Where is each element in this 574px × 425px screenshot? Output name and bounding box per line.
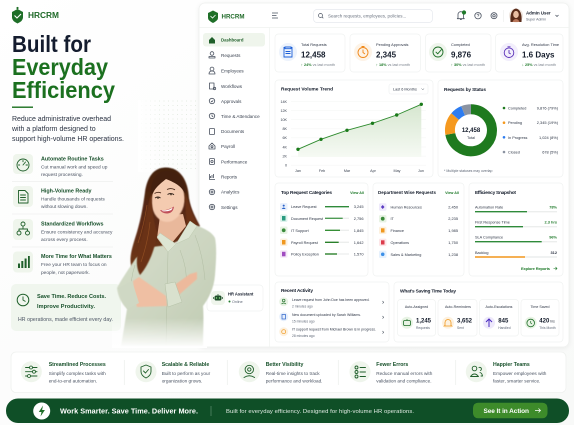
donut card: 12,458 <box>462 128 481 134</box>
x axis: May <box>394 169 401 173</box>
benefit: streamlined <box>21 361 106 384</box>
button: See It in Action <box>484 408 529 415</box>
KPI: resolution time <box>496 34 563 72</box>
top bar: Super Admin <box>526 18 546 22</box>
benefit: scalable: Built to perform as your <box>162 371 211 376</box>
x axis: Apr <box>370 169 377 173</box>
icon: clipboard <box>284 47 292 57</box>
row: leave request: Leave Request <box>291 205 317 209</box>
metric: backlog <box>475 250 558 257</box>
forearms <box>133 277 167 307</box>
row: sales and marketing: 1,238 <box>448 252 458 257</box>
benefits strip <box>11 352 566 392</box>
top hair <box>151 171 186 198</box>
KPI: resolution time: Avg. Resolution Time <box>522 42 559 47</box>
shirt body <box>117 225 216 346</box>
row: IT support: 1,845 <box>354 228 364 233</box>
tile: auto-assigned: Requests <box>416 326 430 330</box>
row: IT: 2,235 <box>448 216 458 221</box>
tile: time saved: 420 hrs <box>539 318 555 324</box>
nav: settings: Settings <box>221 205 238 210</box>
call-to-action banner <box>6 398 569 423</box>
y axis: 8K <box>282 127 288 131</box>
tile: auto-escalations <box>480 300 518 336</box>
efficiency snapshot: Efficiency Snapshot <box>475 190 516 196</box>
benefit: streamlined: Simplify complex tasks with <box>49 371 106 376</box>
line chart card: Request Volume Trend <box>281 86 333 92</box>
what's saving time: What's Saving Time Today <box>400 288 456 294</box>
benefit: visibility <box>239 361 323 384</box>
feature: high-volume ready <box>13 186 105 210</box>
icon: help <box>475 12 481 19</box>
legend: 9,876 (79%) <box>537 106 559 110</box>
KPI: total requests <box>275 34 345 72</box>
nav: analytics: Analytics <box>221 190 240 195</box>
recent activity: Recent Activity <box>281 288 313 294</box>
nav: workflows <box>210 83 243 90</box>
top request categories <box>275 183 368 276</box>
sidebar <box>203 33 265 210</box>
icon: check <box>433 47 443 57</box>
shirt folds <box>131 235 205 345</box>
nav: performance <box>210 158 248 164</box>
nav: analytics <box>209 189 240 195</box>
row: document request: Document Request <box>291 217 324 221</box>
chart line <box>296 103 423 151</box>
row: operations: 1,750 <box>448 240 459 245</box>
row: document request: 2,756 <box>354 216 364 221</box>
sleeve cuffs <box>165 282 182 307</box>
activity 1 <box>279 297 384 308</box>
department requests: View All <box>445 191 459 195</box>
feature: more time <box>13 252 112 276</box>
intro text: with a platform designed to <box>11 126 96 133</box>
collar <box>157 221 197 252</box>
intro text <box>11 116 124 143</box>
metric: SLA compliance <box>475 234 558 242</box>
title: Everyday <box>12 54 108 80</box>
mouth <box>160 206 174 214</box>
benefit: fewer errors: Fewer Errors <box>376 362 408 368</box>
tile: auto-reminders: 3,652 <box>457 318 473 324</box>
row: payroll request: Payroll Request <box>291 241 319 245</box>
donut card <box>438 80 563 177</box>
button <box>473 403 548 418</box>
nav: documents: Documents <box>221 129 245 134</box>
row: finance: Finance <box>390 229 404 233</box>
icon: stopwatch <box>504 47 514 58</box>
neck and chest <box>157 214 186 250</box>
KPI: completed: ↑ 30% vs last month <box>451 63 485 67</box>
icon: lightning <box>33 402 50 420</box>
legend <box>503 106 559 154</box>
top request categories: View All <box>350 191 364 195</box>
row: IT: IT <box>390 217 395 221</box>
x axis <box>295 169 424 173</box>
top bar: Admin User <box>526 11 551 16</box>
hair strands <box>138 205 150 262</box>
row: leave request: 3,245 <box>354 204 364 209</box>
icon: timer <box>358 46 368 58</box>
y axis: 6K <box>282 136 288 140</box>
nav: time <box>209 113 260 119</box>
row: policy exception: 1,570 <box>354 252 364 256</box>
donut chart <box>450 109 492 151</box>
y axis: 10K <box>280 118 288 122</box>
feature: automate routine tasks: Automate Routine Tasks <box>41 156 104 162</box>
nav: workflows: Workflows <box>221 84 243 89</box>
row: finance: 1,985 <box>448 228 458 233</box>
nav: approvals: Approvals <box>221 99 242 104</box>
feature: standardized workflows: Ensure consistency and accuracy <box>41 230 113 236</box>
row: policy exception: Policy Exception <box>291 252 319 256</box>
metric: automation rate: Automation Rate <box>475 206 503 210</box>
tile: auto-escalations: Handled <box>498 326 511 330</box>
tile: auto-assigned <box>398 300 436 336</box>
top bar: HRCRM <box>222 14 244 20</box>
KPI: completed: 9,876 <box>451 50 472 60</box>
legend: In Progress <box>508 136 528 140</box>
KPI: completed: Completed <box>451 42 470 47</box>
nav: employees: Employees <box>221 68 244 74</box>
nav: dashboard <box>209 37 244 44</box>
title: Built for <box>12 31 91 57</box>
callout: Save Time. Reduce Costs. <box>37 294 106 300</box>
KPI: resolution time: ↓ 25% vs last month <box>522 63 556 67</box>
KPI: pending approvals: ↑ 18% vs last month <box>376 63 410 67</box>
feature: automate routine tasks: request processing. <box>41 172 83 178</box>
benefit: happier teams <box>466 361 547 384</box>
benefit: scalable: organization grows. <box>162 379 202 384</box>
row: document request <box>280 214 364 222</box>
what's saving time <box>394 282 563 342</box>
feature: high-volume ready: Handle thousands of requests <box>41 196 105 202</box>
feature: high-volume ready: High-Volume Ready <box>41 188 92 194</box>
legend: Completed <box>508 106 526 110</box>
benefit: happier teams: Empower employees with <box>493 371 547 376</box>
icon: shield logo <box>12 7 23 24</box>
feature: standardized workflows: across every process. <box>41 237 88 243</box>
row: leave request <box>280 203 364 210</box>
link: explore reports: Explore Reports <box>521 266 551 271</box>
feature list <box>12 154 113 276</box>
KPI: pending approvals: 2,345 <box>376 50 397 60</box>
feature: more time: people, not paperwork. <box>41 270 90 276</box>
HR assistant card: Online <box>232 300 243 304</box>
nav: documents <box>210 128 245 134</box>
nav: reports <box>210 174 238 180</box>
row: human resources <box>379 203 459 211</box>
benefit: happier teams: faster, smarter service. <box>493 379 540 384</box>
row: operations: Operations <box>390 241 409 245</box>
row: sales and marketing <box>379 251 458 258</box>
legend: 678 (5%) <box>542 150 559 154</box>
top bar <box>208 8 558 23</box>
department requests <box>373 183 464 276</box>
activity 1: Leave request from John Doe has been approved. <box>292 298 370 302</box>
metric: automation rate: 78% <box>549 204 558 210</box>
KPI: completed <box>426 34 491 72</box>
row: payroll request <box>280 238 364 246</box>
feature: automate routine tasks <box>13 154 108 178</box>
x axis: Mar <box>344 169 351 173</box>
benefit: fewer errors: validation and compliance. <box>376 379 432 384</box>
nav: approvals <box>209 98 242 104</box>
dashboard panel <box>199 3 569 347</box>
activity 3: 28 minutes ago <box>292 334 315 338</box>
metric: first response time: First Response Time <box>475 220 510 224</box>
callout: HR operations, made efficient every day. <box>18 317 113 323</box>
row: payroll request: 1,642 <box>354 240 364 245</box>
y axis <box>280 100 288 168</box>
department requests: Department Wise Requests <box>378 190 436 196</box>
metric: automation rate <box>475 204 558 212</box>
benefit: visibility: Better Visibility <box>266 362 303 368</box>
metric: first response time: 2.3 hrs <box>544 220 557 224</box>
nav: requests <box>209 52 241 58</box>
feature: standardized workflows <box>13 219 113 243</box>
feature: more time: Free your HR team to focus on <box>41 262 107 268</box>
row: IT <box>379 215 458 222</box>
tile: time saved <box>521 300 559 336</box>
avatar <box>509 8 523 22</box>
legend: 1,024 (8%) <box>539 135 559 140</box>
feature: high-volume ready: without slowing down. <box>41 204 88 210</box>
nav: reports: Reports <box>221 174 238 179</box>
icon: clock <box>17 294 29 306</box>
y axis: 12K <box>280 109 288 113</box>
icon: bell <box>457 10 466 20</box>
metric: first response time <box>475 220 557 227</box>
donut card: Requests by Status <box>444 87 486 93</box>
tile: time saved: This Month <box>539 326 556 330</box>
row: operations <box>379 239 459 246</box>
feature: automate routine tasks: Cut manual work and speed up <box>41 164 108 170</box>
activity 3: IT support request from Michael Brown is in progress. <box>292 328 376 332</box>
HR assistant card <box>207 285 263 311</box>
activity 1: 2 minutes ago <box>292 304 313 308</box>
KPI: pending approvals: Pending Approvals <box>376 42 408 47</box>
x axis: Feb <box>319 169 325 173</box>
title: Efficiency <box>12 77 115 103</box>
row: finance <box>379 227 458 234</box>
row: sales and marketing: Sales & Marketing <box>390 253 421 257</box>
call-to-action banner: Built for everyday efficiency. Designed for high-volume HR operations. <box>226 409 414 415</box>
feature: more time: More Time for What Matters <box>41 254 112 260</box>
metric: backlog: 312 <box>550 250 558 255</box>
nav: requests: Requests <box>221 53 241 58</box>
tile: auto-reminders: Auto-Reminders <box>445 305 471 309</box>
row: human resources: 2,450 <box>448 204 459 210</box>
benefit: streamlined: end-to-end automation. <box>49 379 97 384</box>
KPI: total requests: ↑ 24% vs last month <box>301 63 335 67</box>
tile: auto-escalations: Auto-Escalations <box>486 305 513 309</box>
top request categories: Top Request Categories <box>281 190 332 196</box>
tile: auto-reminders <box>438 300 477 336</box>
KPI: total requests: 12,458 <box>301 50 326 60</box>
activity 2: New document uploaded by Sarah Williams. <box>292 313 361 317</box>
face <box>149 176 187 224</box>
nav: time: Time & Attendance <box>221 114 260 119</box>
brand logo <box>12 7 59 24</box>
tile: auto-assigned: 1,245 <box>416 318 432 324</box>
efficiency snapshot <box>469 183 563 276</box>
feature: standardized workflows: Standardized Workflows <box>41 222 104 228</box>
y axis: 0 <box>285 164 287 168</box>
benefit: scalable <box>136 361 211 384</box>
row: policy exception <box>280 250 364 258</box>
nav: dashboard: Dashboard <box>221 37 244 42</box>
nav: payroll <box>209 143 235 149</box>
row: IT support <box>280 226 364 234</box>
KPI: resolution time: 1.6 Days <box>522 50 555 60</box>
tile: auto-reminders: Sent <box>457 326 464 330</box>
side hair locks <box>137 192 198 275</box>
x axis: Jun <box>418 169 424 173</box>
benefit: visibility: performance and workload. <box>266 379 323 384</box>
activity 2: 15 minutes ago <box>292 320 315 324</box>
nav: performance: Performance <box>221 159 248 164</box>
recent activity <box>275 282 389 342</box>
KPI: pending approvals <box>350 34 420 72</box>
dropdown <box>389 84 428 94</box>
benefit: fewer errors: Reduce manual errors with <box>376 371 433 376</box>
tile: time saved: Time Saved <box>530 305 550 309</box>
icon: robot <box>214 294 222 300</box>
back hair <box>130 167 200 277</box>
search box: Search requests, employees, policies... <box>328 14 406 19</box>
tile: auto-assigned: Auto-Assigned <box>405 305 428 309</box>
benefit: scalable: Scalable & Reliable <box>162 362 209 368</box>
dropdown: Last 6 Months <box>393 88 417 92</box>
metric: SLA compliance: 96% <box>549 234 558 240</box>
eyes and brows <box>154 189 175 199</box>
nav: employees <box>209 67 244 74</box>
HR assistant card: HR Assistant <box>228 292 254 296</box>
metric: backlog: Backlog <box>475 251 489 255</box>
y axis: 14K <box>280 100 288 104</box>
y axis: 2K <box>282 154 288 158</box>
benefit: streamlined: Streamlined Processes <box>49 362 106 368</box>
intro text: Reduce administrative overhead <box>12 116 111 123</box>
x axis: Jan <box>295 169 301 173</box>
intro text: support high-volume HR operations. <box>12 136 124 143</box>
call-to-action banner: Work Smarter. Save Time. Deliver More. <box>60 406 198 416</box>
legend: Pending <box>508 121 522 125</box>
row: human resources: Human Resources <box>390 206 422 210</box>
benefit: happier teams: Happier Teams <box>493 362 530 368</box>
legend: 2,345 (19%) <box>537 120 559 125</box>
donut card: * Multiple statuses may overlap <box>444 169 492 173</box>
search box <box>314 10 432 22</box>
nav: settings <box>209 204 238 210</box>
bottom fade <box>112 318 207 348</box>
portrait: smiling woman <box>112 167 216 348</box>
nav: payroll: Payroll <box>221 144 235 149</box>
icon: dashboard logo <box>208 10 218 23</box>
activity 2 <box>279 312 384 324</box>
benefit: fewer errors <box>350 361 433 384</box>
callout <box>11 284 121 331</box>
title <box>12 31 115 103</box>
chart area <box>298 104 421 157</box>
callout: Improve Productivity. <box>37 304 95 310</box>
y axis: 4K <box>282 145 288 149</box>
metric: SLA compliance: SLA Compliance <box>475 236 503 240</box>
donut card: Total <box>467 136 475 140</box>
KPI: total requests: Total Requests <box>301 42 327 47</box>
tile: auto-escalations: 845 <box>498 318 509 324</box>
line chart card <box>275 80 433 177</box>
activity 3 <box>279 327 384 338</box>
brand logo: HRCRM <box>28 11 59 20</box>
legend: Closed <box>508 150 520 154</box>
icon: gear <box>491 13 497 19</box>
row: IT support: IT Support <box>291 229 310 233</box>
benefit: visibility: Real-time insights to track <box>266 371 320 376</box>
